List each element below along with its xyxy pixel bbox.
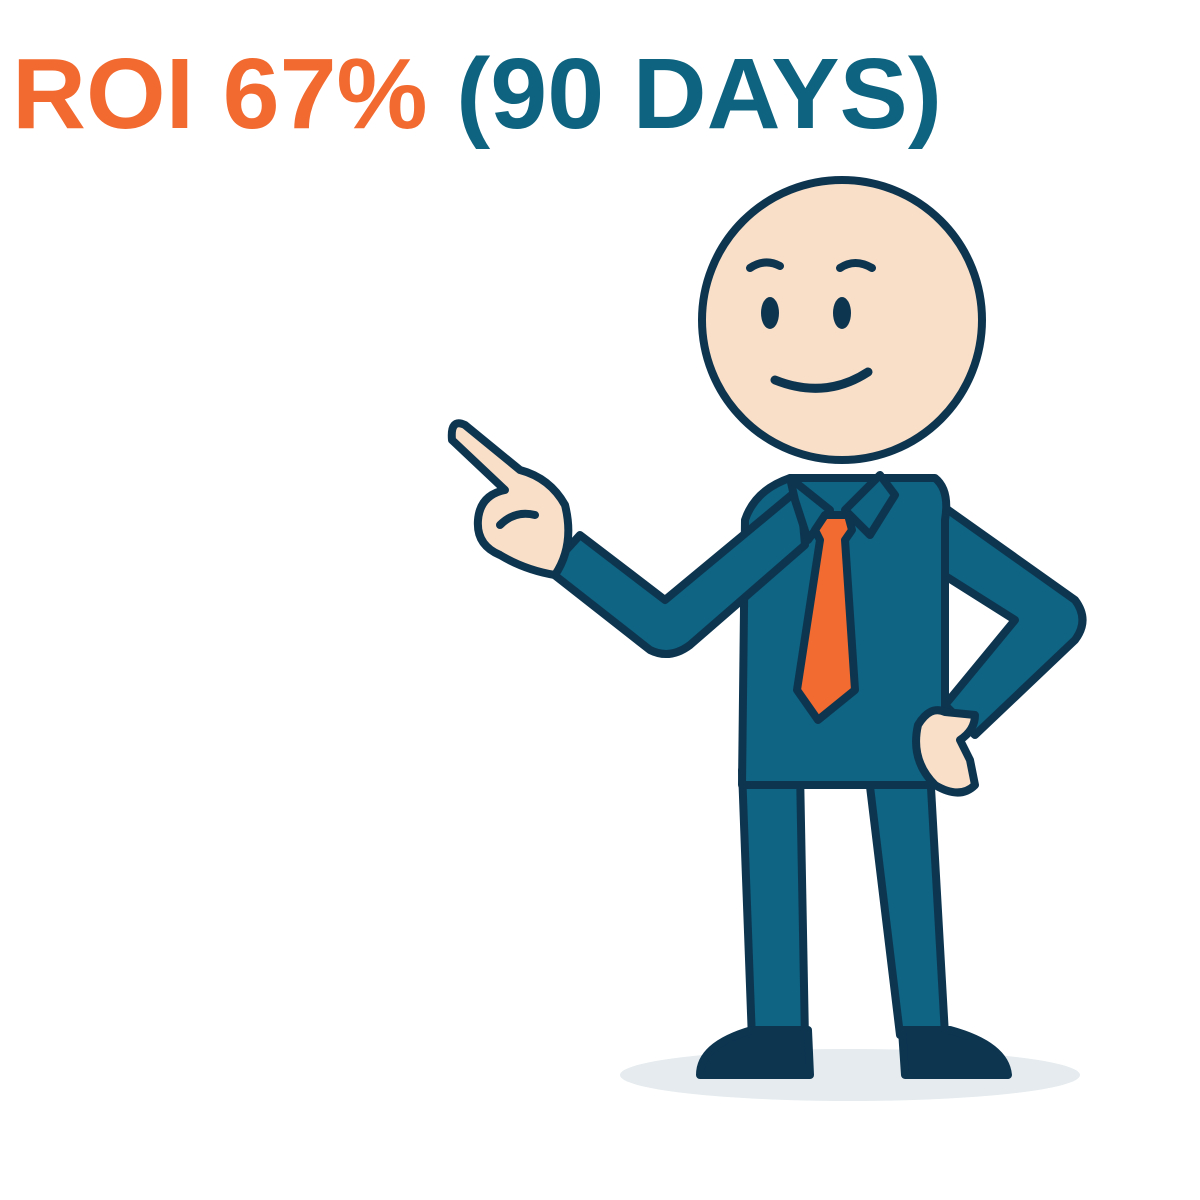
right arm (hand on hip) — [920, 490, 1082, 735]
shoes — [700, 1030, 1008, 1075]
head — [702, 180, 982, 460]
figure: businessman — [452, 180, 1082, 1075]
legs — [742, 770, 945, 1040]
pointing hand — [452, 423, 568, 575]
title: ROI 67% (90 DAYS) — [12, 38, 942, 150]
left arm pointing — [548, 488, 805, 654]
shadow — [620, 1049, 1080, 1101]
face — [761, 297, 851, 329]
torso — [742, 478, 946, 785]
hand on hip — [916, 710, 975, 792]
collar and tie — [790, 478, 830, 540]
